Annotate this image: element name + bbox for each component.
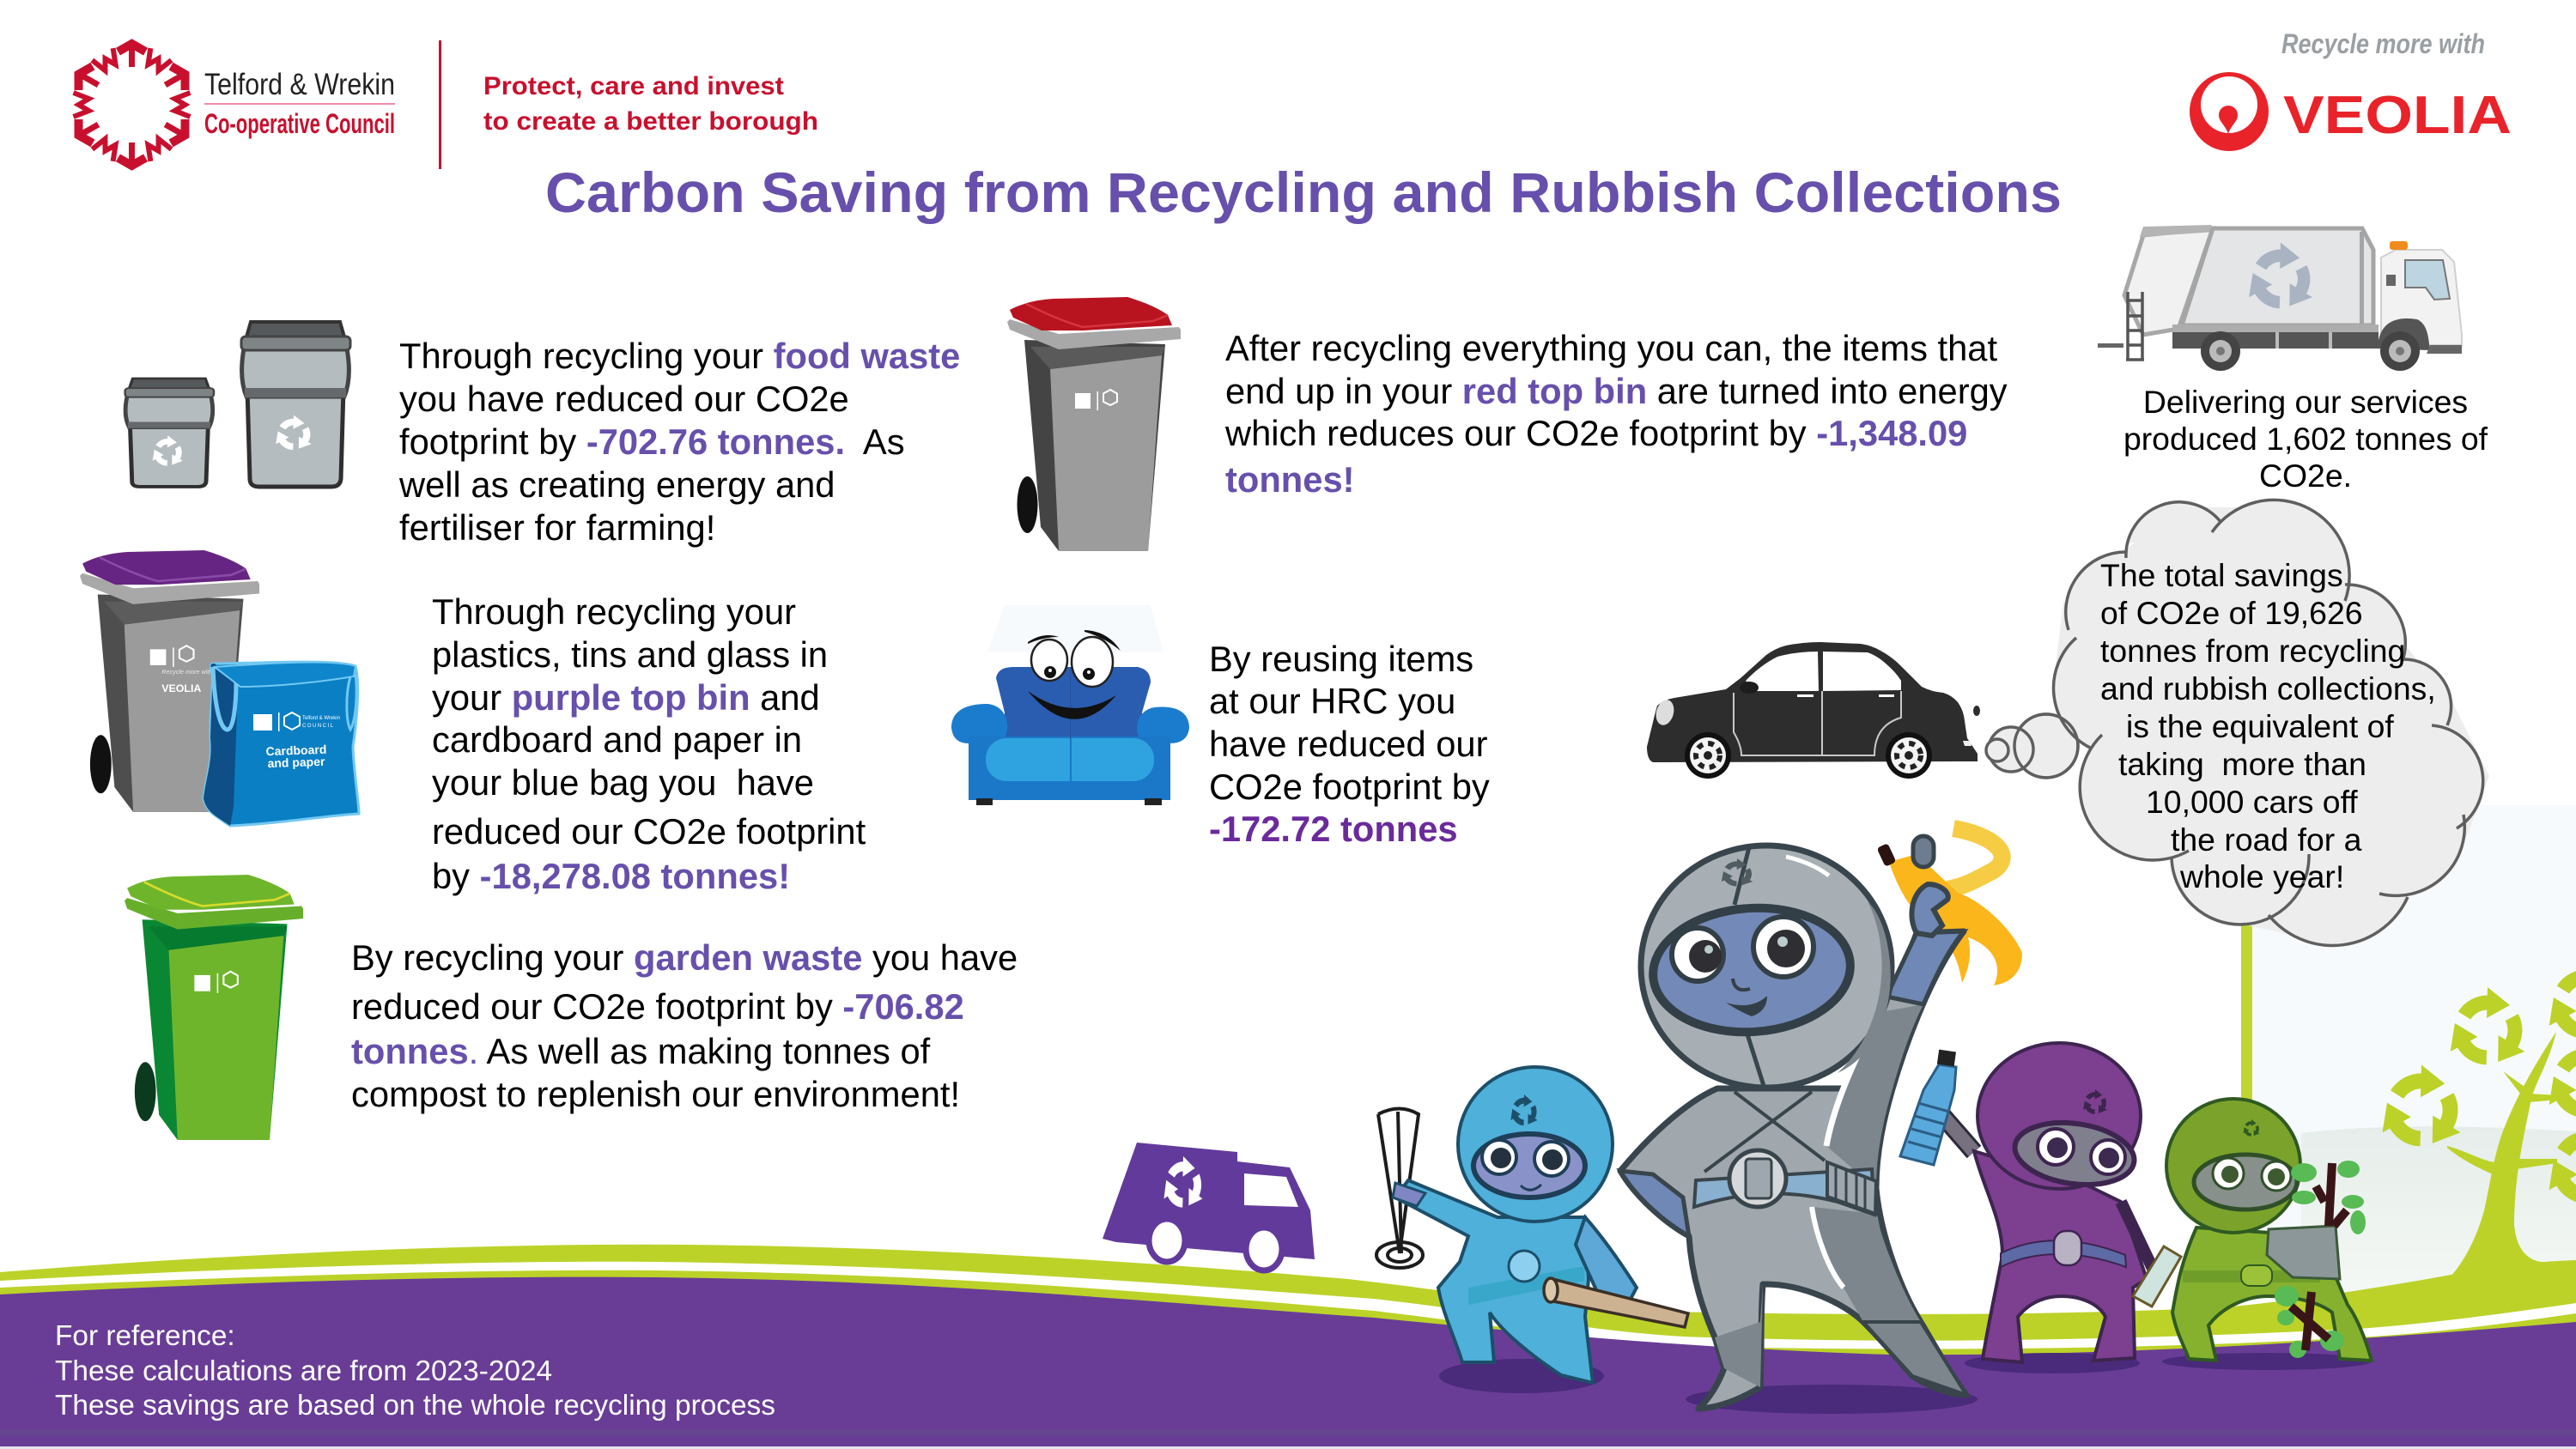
character: blue ninja with scroll and tube xyxy=(1376,1067,1688,1393)
text block: purple top bin: your purple top bin and xyxy=(432,677,820,718)
cloud text: of CO2e of 19,626 xyxy=(2100,595,2363,631)
face xyxy=(1649,901,1855,1039)
icon: black car xyxy=(1647,642,1980,779)
text block: red top bin: end up in your red top bin are turned into energy xyxy=(1225,371,2008,411)
cloud outline xyxy=(2014,500,2489,945)
icon: green garden waste bin xyxy=(125,875,303,1140)
icon: purple recycling truck xyxy=(1103,1143,1315,1270)
footer note: These calculations are from 2023-2024 xyxy=(55,1355,552,1387)
cloud text: whole year! xyxy=(2179,858,2344,894)
footer note: For reference: xyxy=(55,1320,235,1352)
tree with recycling arrows xyxy=(2371,961,2576,1288)
cloud text: the road for a xyxy=(2171,822,2362,858)
cloud text: The total savings xyxy=(2100,557,2343,593)
cloud text: taking more than xyxy=(2118,746,2366,782)
footer note xyxy=(55,1320,775,1422)
text block: purple top bin: cardboard and paper in xyxy=(432,719,802,760)
text block: reuse at HRC: have reduced our xyxy=(1209,724,1488,764)
text block: food waste: footprint by -702.76 tonnes. As xyxy=(399,421,905,462)
thought bubbles xyxy=(1986,714,2078,778)
Veolia logo xyxy=(2190,28,2512,151)
thought cloud xyxy=(0,0,2489,945)
text block: garden waste: By recycling your garden waste you have xyxy=(351,937,1018,978)
icon: blue cardboard bag: Telford & Wrekin xyxy=(302,716,340,721)
icon: red top bin xyxy=(1007,297,1181,551)
icon: purple lidded wheelie bin: VEOLIA xyxy=(161,682,201,694)
icon: purple lidded wheelie bin: Recycle more with xyxy=(161,668,212,676)
icon: blue cardboard bag: and paper xyxy=(267,755,325,770)
text block: reuse at HRC: -172.72 tonnes xyxy=(1209,809,1458,849)
character: green ninja xyxy=(2162,1099,2372,1370)
text block: reuse at HRC: By reusing items xyxy=(1209,639,1473,679)
text block: purple top bin: reduced our CO2e footprint xyxy=(432,811,866,852)
text block: services footprint: CO2e. xyxy=(2259,458,2352,494)
strapline xyxy=(483,72,818,136)
text block: red top bin: After recycling everything you can, the items that xyxy=(1225,328,1997,368)
text block: red top bin: which reduces our CO2e footprint by -1,348.09 xyxy=(1225,413,1967,453)
icon: purple lidded wheelie bin xyxy=(80,550,259,812)
icon: twisted scroll xyxy=(1376,1109,1423,1268)
Veolia logo: Recycle more with xyxy=(2281,28,2485,59)
icon: large caddy xyxy=(241,322,350,487)
belt xyxy=(1694,1150,1876,1215)
cloud text: tonnes from recycling xyxy=(2100,633,2405,669)
icon: cardboard tube xyxy=(1544,1278,1688,1327)
text block: purple top bin: your blue bag you have xyxy=(432,762,814,803)
icon: blue cardboard bag xyxy=(204,662,359,826)
icon: blue cardboard bag: COUNCIL xyxy=(302,724,335,729)
council name: Telford & Wrekin xyxy=(204,68,395,101)
icon: small caddy xyxy=(125,379,214,487)
text block: purple top bin: by -18,278.08 tonnes! xyxy=(432,856,790,896)
scenery: pale panel and hills behind the ninjas xyxy=(2241,805,2576,1296)
text block: reuse at HRC: CO2e footprint by xyxy=(1209,767,1490,807)
divider xyxy=(439,40,441,169)
character: purple ninja xyxy=(1900,1043,2181,1373)
icon: hexagonal council emblem xyxy=(70,44,192,166)
text block: services footprint xyxy=(2123,384,2488,494)
icon: blue cardboard bag: Cardboard xyxy=(265,743,327,758)
cloud text: 10,000 cars off xyxy=(2146,784,2358,820)
Veolia logo: VEOLIA xyxy=(2283,86,2512,145)
title: Carbon Saving from Recycling and Rubbish Collections xyxy=(545,161,2062,224)
icon: Veolia ring and drop xyxy=(2190,72,2269,151)
text block: reuse at HRC: at our HRC you xyxy=(1209,681,1455,721)
strapline: Protect, care and invest xyxy=(483,72,784,100)
text block: garden waste: tonnes. As well as making tonnes of xyxy=(351,1031,930,1071)
strapline: to create a better borough xyxy=(483,107,818,136)
text block: services footprint: produced 1,602 tonnes of xyxy=(2123,421,2488,457)
ground swoosh: lime, white and purple bands xyxy=(0,1245,2576,1449)
text block: purple top bin: plastics, tins and glass in xyxy=(432,634,828,675)
icon: refuse collection lorry xyxy=(2098,225,2462,371)
text block: garden waste: reduced our CO2e footprint by -706.82 xyxy=(351,986,964,1027)
text block: red top bin: tonnes! xyxy=(1225,459,1355,500)
text block: food waste: Through recycling your food waste xyxy=(399,336,960,376)
Telford and Wrekin council logo xyxy=(70,44,395,166)
text block: purple top bin: Through recycling your xyxy=(432,591,796,632)
cloud text: is the equivalent of xyxy=(2126,708,2394,744)
cloud text: and rubbish collections, xyxy=(2100,670,2436,706)
text block: food waste: you have reduced our CO2e xyxy=(399,379,849,419)
text block: services footprint: Delivering our services xyxy=(2143,384,2468,420)
helmet xyxy=(1641,846,1892,1088)
text block: food waste: fertiliser for farming! xyxy=(399,507,715,548)
footer note: These savings are based on the whole recycling process xyxy=(55,1390,775,1422)
character: large silver ninja with banana xyxy=(1620,828,2022,1414)
icon: smiling blue sofa xyxy=(951,605,1189,805)
text block: garden waste: compost to replenish our environment! xyxy=(351,1074,960,1114)
icon: banana peel xyxy=(1877,828,2022,985)
Telford and Wrekin council logo: Co-operative Council xyxy=(204,108,395,139)
icon: purple top bin and blue bag xyxy=(80,550,359,826)
text block: food waste: well as creating energy and xyxy=(398,464,835,505)
icon: food waste caddies xyxy=(125,322,350,487)
